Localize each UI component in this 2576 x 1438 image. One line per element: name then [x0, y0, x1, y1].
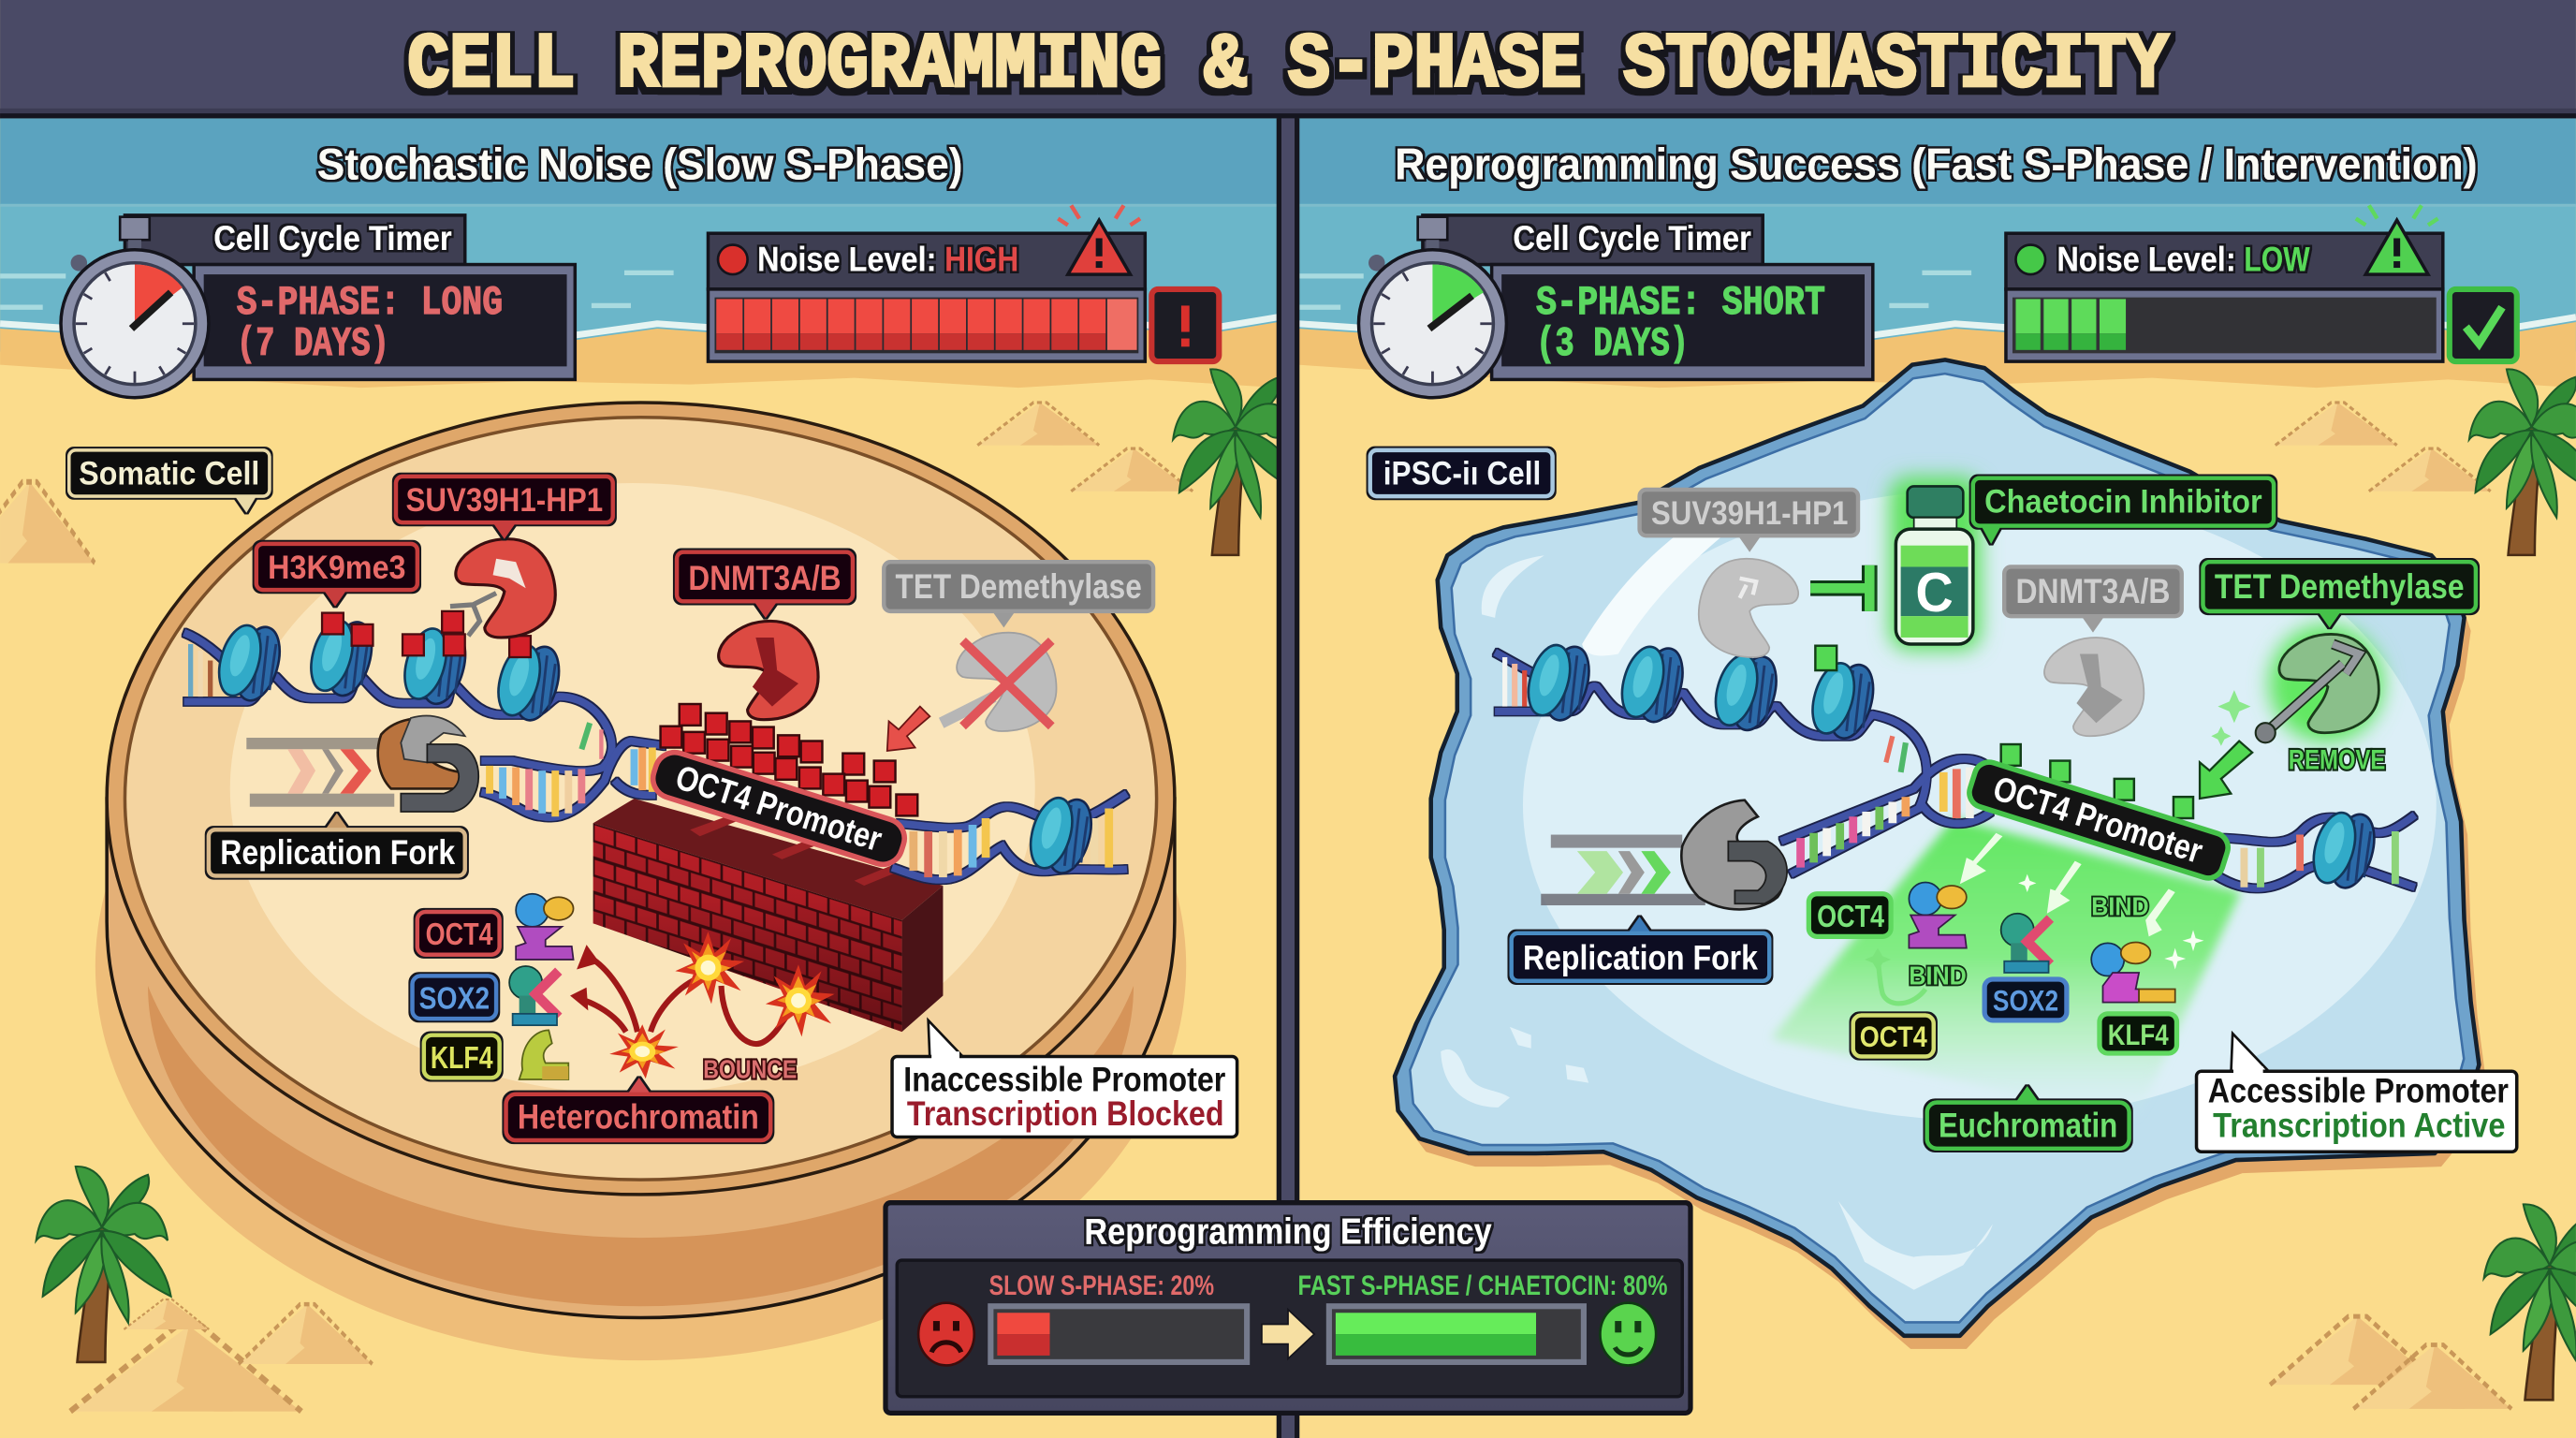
icon: OCT4 factor — [516, 894, 574, 960]
arrow: remove — [2200, 741, 2252, 799]
title: CELL REPROGRAMMING & S-PHASE STOCHASTICITY — [407, 21, 2169, 109]
label: OCT4: OCT4 — [426, 917, 493, 952]
enzyme: SUV39H1-HP1 (inactive) — [1699, 559, 1798, 657]
palm tree — [2484, 1204, 2576, 1400]
label: replication fork: Replication Fork — [220, 833, 456, 872]
label: DNMT3A/B — [677, 552, 853, 618]
label: DNMT3A/B (inactive) — [2004, 566, 2182, 633]
noise level meter: high: Noise Level: — [757, 241, 936, 279]
label: SUV39H1-HP1 (inactive): SUV39H1-HP1 — [1651, 495, 1848, 532]
noise level meter: low: Noise Level: — [2056, 241, 2236, 279]
noise bar segments — [2015, 299, 2126, 350]
palm tree — [2469, 369, 2576, 555]
somatic cell — [95, 403, 1186, 1360]
label: TET demethylase (inactive) — [884, 562, 1153, 627]
OCT4 promoter banner: OCT4 Promoter — [671, 757, 886, 858]
icon: KLF4 factor — [2091, 943, 2175, 1003]
icon: SOX2 factor — [2001, 914, 2050, 973]
icon: happy face — [1600, 1303, 1656, 1365]
callout: accessible promoter — [2197, 1034, 2517, 1152]
enzyme: TET demethylase (active) — [2211, 624, 2384, 746]
OCT4 promoter banner: OCT4 Promoter — [1989, 769, 2207, 871]
panel: reprogramming efficiency: FAST S-PHASE / CHAETOCIN: 80% — [1298, 1270, 1667, 1301]
iPSC cell membrane — [1395, 360, 2485, 1349]
label: SUV39H1-HP1: SUV39H1-HP1 — [406, 482, 603, 519]
noise level meter: high: HIGH — [944, 241, 1018, 279]
icon: stopwatch — [1358, 217, 1506, 398]
panel: reprogramming efficiency — [886, 1203, 1690, 1413]
arrow: bind path — [1865, 948, 1925, 1004]
label: heterochromatin: Heterochromatin — [518, 1098, 759, 1137]
noise level meter: high — [708, 205, 1219, 361]
bar: fast S-phase 80% — [1329, 1306, 1584, 1362]
green demethylated marks — [1815, 646, 2193, 818]
callout: inaccessible promoter: Transcription Blocked — [907, 1094, 1224, 1133]
enzyme: DNMT3A/B (inactive) — [2044, 638, 2144, 736]
alert box — [1151, 289, 1219, 361]
enzyme: SUV39H1-HP1 — [450, 539, 555, 638]
palm tree — [1172, 368, 1277, 556]
label: chaetocin inhibitor — [1973, 478, 2274, 544]
label: KLF4: KLF4 — [2108, 1018, 2169, 1051]
cell cycle timer: short: (3 DAYS) — [1536, 321, 1689, 368]
inactive TET enzyme with cross — [942, 633, 1057, 731]
panel: reprogramming efficiency: SLOW S-PHASE: 20% — [989, 1270, 1214, 1301]
callout: inaccessible promoter — [892, 1020, 1237, 1137]
bar: slow S-phase 20% — [990, 1306, 1247, 1362]
cell cycle timer: short: Cell Cycle Timer — [1513, 219, 1751, 257]
label: SOX2: SOX2 — [419, 982, 490, 1017]
noise bar segments — [716, 299, 1137, 350]
label: euchromatin: Euchromatin — [1939, 1106, 2117, 1144]
beach background — [0, 118, 1279, 388]
icon: stopwatch — [61, 217, 209, 398]
check box — [2450, 289, 2517, 361]
label: OCT4: OCT4 — [1817, 900, 1884, 934]
label: SUV39H1-HP1 (inactive) — [1640, 490, 1858, 552]
label: OCT4 — [1808, 894, 1891, 936]
cell cycle timer: long: Cell Cycle Timer — [213, 219, 452, 257]
label: heterochromatin — [506, 1078, 770, 1140]
label: BIND: BIND — [1909, 961, 1967, 990]
label: SUV39H1-HP1 — [396, 477, 613, 539]
label: H3K9me3 — [256, 544, 417, 607]
heading: Reprogramming Efficiency — [1084, 1212, 1492, 1253]
label: H3K9me3: H3K9me3 — [268, 550, 406, 586]
icon: KLF4 factor — [520, 1030, 568, 1079]
blocked arrow — [887, 707, 929, 751]
label: DNMT3A/B (inactive): DNMT3A/B — [2015, 572, 2170, 610]
bounce arrows and explosions — [570, 932, 835, 1078]
DNA helix right of promoter — [892, 793, 1127, 880]
title banner — [0, 0, 2576, 120]
label: BOUNCE: BOUNCE — [703, 1054, 797, 1083]
callout: accessible promoter: Transcription Active — [2213, 1106, 2505, 1144]
label: DNMT3A/B: DNMT3A/B — [688, 559, 842, 597]
replication fork machinery — [246, 716, 478, 812]
icon: warning triangle — [1068, 220, 1131, 274]
panel: stochastic noise (slow S-phase) — [0, 118, 1301, 1438]
bottle letter: C — [1915, 561, 1954, 624]
callout: accessible promoter: Accessible Promoter — [2208, 1072, 2509, 1110]
cell cycle timer: long: (7 DAYS) — [237, 321, 389, 368]
label: replication fork — [209, 814, 465, 875]
status spark — [2356, 205, 2438, 225]
inhibition bar — [1810, 565, 1869, 611]
label: KLF4 — [424, 1035, 500, 1078]
label: TET demethylase (active): TET Demethylase — [2215, 567, 2465, 606]
icon: sad face — [918, 1303, 974, 1365]
cell cycle timer: short — [1358, 215, 1873, 398]
icon: chaetocin bottle — [1889, 477, 1982, 651]
DNA helix right of promoter — [2210, 808, 2415, 893]
label: iPSC cell: iPSC-iı Cell — [1383, 456, 1541, 492]
beach background — [1298, 118, 2576, 1438]
icon: OCT4 factor — [1909, 882, 1967, 948]
DNA methyl bricks — [661, 704, 917, 815]
label: somatic cell: Somatic Cell — [79, 456, 259, 492]
label: replication fork: Replication Fork — [1523, 938, 1758, 976]
cell cycle timer: long: S-PHASE: LONG — [237, 280, 503, 327]
replication fork machinery — [1541, 800, 1787, 909]
label: SOX2: SOX2 — [1993, 983, 2058, 1017]
panel: reprogramming success (fast S-phase / intervention) — [1298, 118, 2576, 1438]
central divider — [1277, 118, 1299, 1438]
label: KLF4: KLF4 — [431, 1041, 493, 1076]
label: chaetocin inhibitor: Chaetocin Inhibitor — [1984, 484, 2262, 521]
H3K9me3 methyl marks — [322, 611, 531, 657]
transcription factors — [1808, 882, 2176, 1056]
label: BIND: BIND — [2091, 892, 2149, 921]
icon: caution triangle — [2365, 220, 2428, 274]
panel heading: right: Reprogramming Success (Fast S-Phase / Intervention) — [1395, 139, 2478, 189]
arrow — [1262, 1310, 1314, 1358]
palm tree — [37, 1167, 171, 1362]
enzyme: DNMT3A/B — [719, 621, 818, 720]
heterochromatin brick wall — [593, 799, 943, 1032]
transcription factors — [413, 894, 574, 1079]
chromatin strand with nucleosomes — [1495, 640, 1995, 874]
cell cycle timer: short: S-PHASE: SHORT — [1536, 280, 1825, 327]
panel heading: left: Stochastic Noise (Slow S-Phase) — [317, 139, 963, 189]
noise level meter: low — [2006, 205, 2517, 361]
label: somatic cell — [69, 450, 270, 513]
label: OCT4 — [417, 912, 500, 955]
cell cycle timer: long — [61, 215, 575, 398]
warning spark — [1058, 205, 1140, 225]
label: TET demethylase (active) — [2203, 562, 2476, 627]
noise level meter: low: LOW — [2244, 241, 2310, 279]
label: remove: REMOVE — [2289, 744, 2385, 775]
label: OCT4: OCT4 — [1860, 1020, 1927, 1053]
label: replication fork — [1512, 917, 1769, 981]
chromatin strand with nucleosomes — [184, 616, 666, 817]
label: TET demethylase (inactive): TET Demethylase — [896, 567, 1142, 606]
icon: SOX2 factor — [509, 966, 559, 1025]
callout: inaccessible promoter: Inaccessible Promoter — [903, 1060, 1225, 1098]
sand dunes — [2270, 403, 2511, 1409]
sand dunes — [0, 403, 1193, 1412]
label: euchromatin — [1927, 1086, 2130, 1149]
green accessible light cone — [1771, 818, 2241, 1121]
